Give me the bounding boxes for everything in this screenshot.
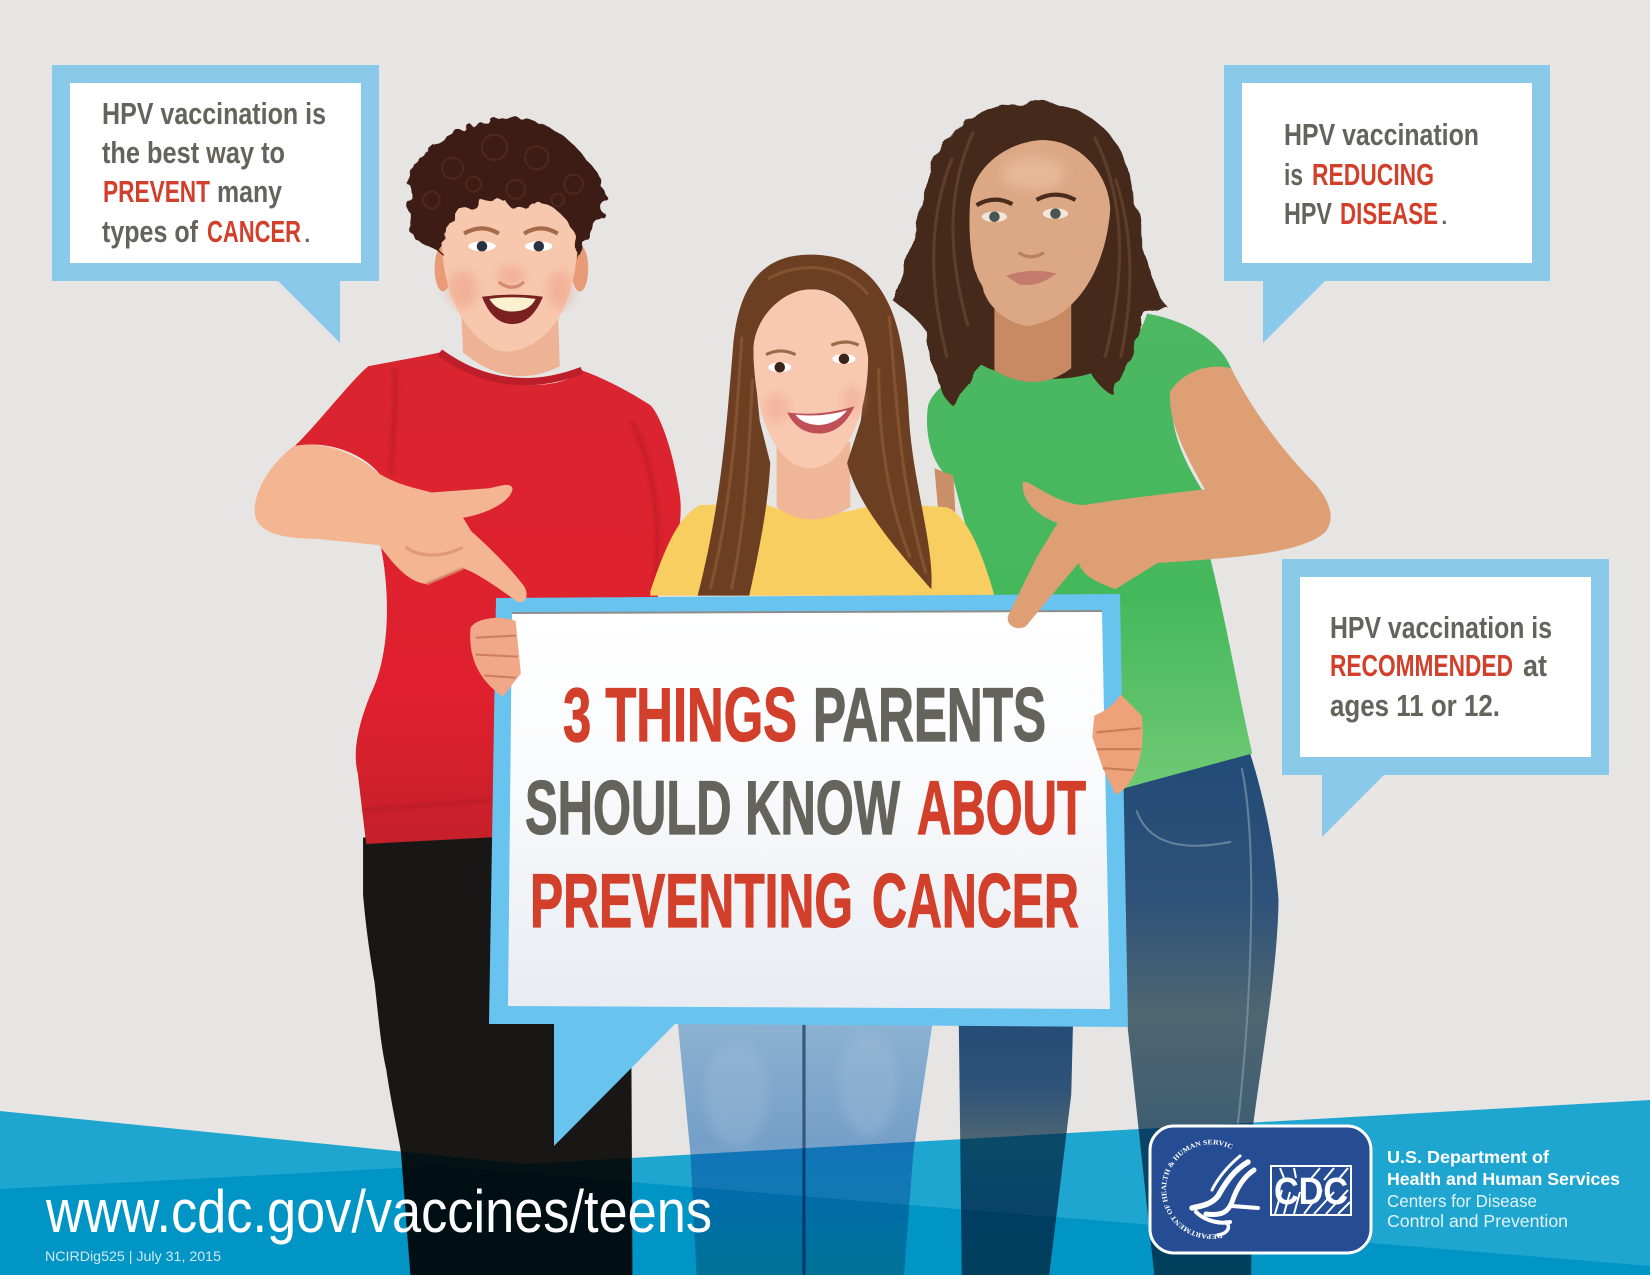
sign: white panel (508, 612, 1110, 1009)
middle girl: hair strands (710, 268, 926, 589)
callout: reducing disease (1224, 65, 1550, 343)
band: light wave (0, 1100, 1650, 1275)
callout text (102, 96, 326, 249)
middle girl: face (753, 289, 868, 468)
boy: collar (440, 353, 582, 382)
boy: ears (435, 245, 588, 291)
middle girl: faded denim patches (705, 1031, 898, 1147)
callout panel (70, 83, 361, 263)
right girl: hand holding sign (1092, 695, 1143, 794)
right girl: front hair (926, 226, 1142, 405)
boy: hand holding sign (470, 618, 521, 697)
callout text: the best way to (102, 135, 285, 170)
sign heading: CANCER (872, 859, 1079, 944)
right girl: far arm (934, 468, 955, 516)
callout text: HPV vaccination is (102, 96, 326, 131)
right girl: face (969, 140, 1110, 326)
callout frame (52, 65, 379, 343)
sign: blue frame and tail (489, 594, 1128, 1146)
callout panel (1242, 83, 1532, 263)
logo: cdc box: CDC (1274, 1171, 1348, 1213)
boy: cheeks (448, 265, 572, 308)
right girl: green t-shirt (927, 314, 1252, 789)
callout text: at (1523, 648, 1547, 683)
right girl: pointing arm (1008, 367, 1331, 628)
sign heading: PARENTS (813, 673, 1046, 758)
right girl: back hair (892, 102, 1168, 402)
callout text (1284, 117, 1479, 231)
right girl: jeans near leg (1105, 753, 1279, 1275)
right girl: forehead highlight (1002, 157, 1065, 190)
logo: hhs seal text: DEPARTMENT OF HEALTH & HUMAN SERVICES · USA (1161, 1140, 1233, 1239)
boy: shirt folds (363, 368, 657, 810)
boy: hair curls (423, 135, 583, 208)
agency name: Health and Human Services (1387, 1169, 1620, 1189)
boy: hand shading (405, 547, 463, 584)
right girl: jeans far leg (959, 1010, 1073, 1275)
middle girl: teeth (796, 410, 847, 425)
right girl: jeans pocket seam (1136, 768, 1251, 1136)
callout: recommended ages (1282, 559, 1609, 837)
boy: red t-shirt (295, 353, 681, 844)
callout text: CANCER (207, 214, 301, 249)
callout text: PREVENT (103, 174, 210, 209)
boy: smile (482, 295, 543, 324)
callout text: many (217, 174, 283, 209)
callout text: . (1440, 196, 1449, 231)
boy: neck (461, 305, 560, 376)
callout text: . (303, 214, 312, 249)
logo: rounded panel (1150, 1126, 1371, 1253)
band: dark wave (0, 1166, 1650, 1275)
middle girl: eyes and brows (766, 342, 859, 373)
right girl: hair strands (934, 132, 1130, 358)
boy: pointing arm (255, 445, 527, 602)
right girl: eyes and brows (977, 195, 1075, 257)
agency name (1387, 1147, 1620, 1231)
middle girl: cheeks (764, 385, 863, 423)
middle girl: neck (777, 442, 850, 519)
sign heading: ABOUT (917, 766, 1086, 851)
middle girl: long hair (698, 255, 932, 596)
boy: face (442, 190, 577, 352)
boy: black trousers (363, 821, 632, 1275)
children photo: bodies (295, 102, 1279, 1275)
boy: curly hair (408, 116, 605, 258)
callout text: HPV (1284, 196, 1332, 231)
callout text: types of (102, 214, 199, 249)
sign heading (525, 673, 1086, 944)
right girl: lips (1006, 271, 1057, 285)
callout text: HPV vaccination is (1330, 610, 1552, 645)
sign heading: SHOULD KNOW (525, 766, 900, 851)
callout text: ages 11 or 12. (1330, 688, 1500, 723)
children photo: arms and hands over sign (255, 367, 1331, 794)
main sign speech bubble (489, 594, 1128, 1146)
blue footer band (0, 1100, 1650, 1275)
callout text (1330, 610, 1552, 723)
callout text: HPV vaccination (1284, 117, 1479, 152)
sign heading: PREVENTING (530, 859, 853, 944)
callout frame (1282, 559, 1609, 837)
callout text: REDUCING (1312, 157, 1434, 192)
callout panel (1300, 577, 1591, 757)
logo: eagle (1192, 1156, 1258, 1235)
middle girl: jeans (677, 1010, 934, 1275)
agency name: U.S. Department of (1387, 1147, 1549, 1167)
agency name: Control and Prevention (1387, 1211, 1568, 1231)
callout text: is (1284, 157, 1303, 192)
middle girl: yellow shirt (650, 503, 994, 596)
sign heading: 3 THINGS (563, 673, 797, 758)
publication id: NCIRDig525 | July 31, 2015 (45, 1248, 221, 1264)
right girl: neck (994, 300, 1071, 382)
callout text: DISEASE (1340, 196, 1438, 231)
middle girl: smile (787, 406, 854, 434)
website url: www.cdc.gov/vaccines/teens (45, 1178, 712, 1245)
callout text: RECOMMENDED (1330, 648, 1513, 683)
callout frame (1224, 65, 1550, 343)
middle girl: jeans inseam (802, 1021, 805, 1275)
boy: eyes and brows (464, 228, 558, 287)
callout: prevent cancer (52, 65, 379, 343)
agency name: Centers for Disease (1387, 1191, 1537, 1211)
boy: teeth (489, 297, 536, 311)
sign: shadow line (512, 610, 1102, 616)
